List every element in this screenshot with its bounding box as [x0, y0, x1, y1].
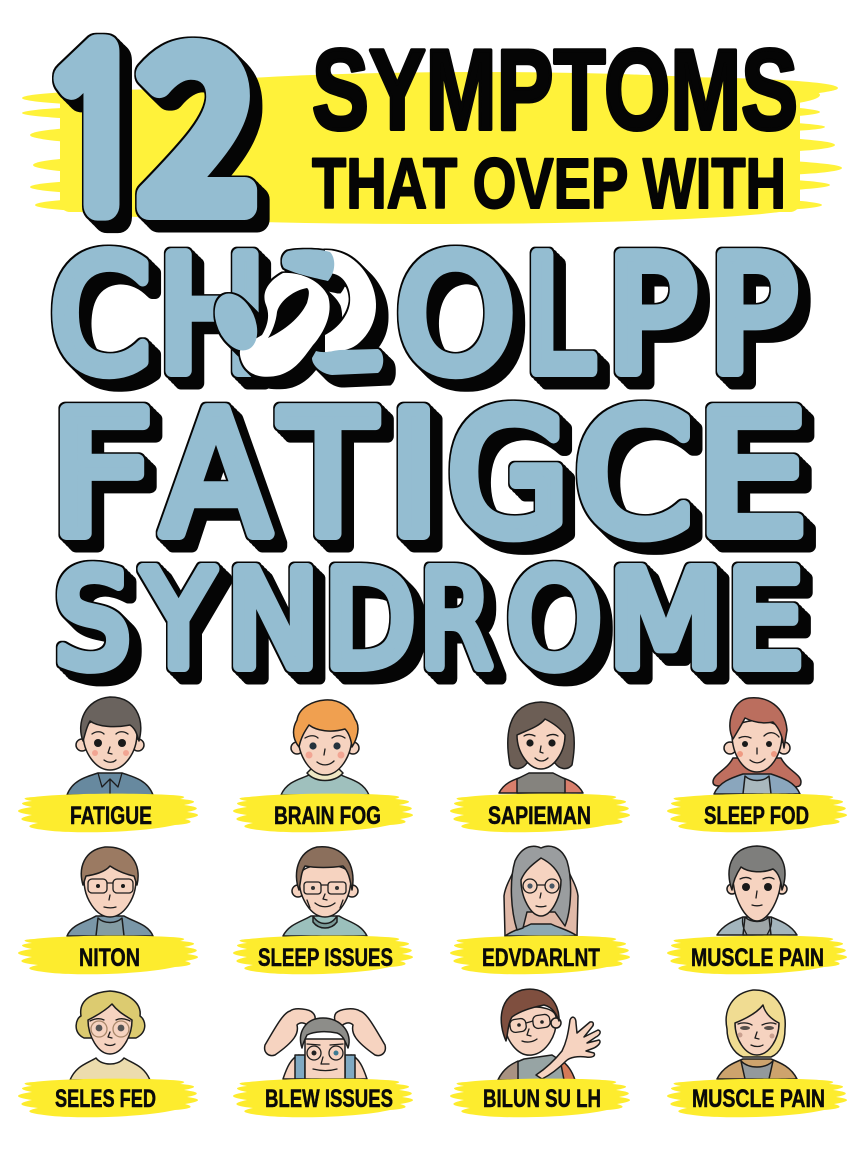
title line: SYNDROME — [54, 544, 804, 698]
title line: FATIGCE: T — [280, 376, 376, 574]
symptom: sleep fod — [667, 698, 847, 832]
title line: CH2OLPP — [50, 224, 797, 408]
label: BILUN SU LH — [483, 1085, 601, 1113]
title line: SYNDROME: R — [420, 544, 492, 698]
brush highlight — [450, 1079, 630, 1117]
label: FATIGUE — [70, 802, 152, 830]
portrait: grey-haired man raising both hands to head — [265, 1009, 385, 1079]
label: EDVDARLNT — [482, 944, 600, 972]
label: MUSCLE PAIN — [692, 1085, 825, 1113]
title line: FATIGCE: A — [162, 376, 270, 574]
symptom: edvdarlnt — [450, 846, 630, 974]
title line: SYNDROME: M — [608, 544, 724, 698]
label: BLEW ISSUES — [265, 1085, 393, 1113]
portrait: blonde woman with bob and thin glasses — [70, 991, 150, 1080]
title line: CH2OLPP: P — [709, 224, 797, 408]
title line: FATIGCE — [49, 376, 808, 574]
portrait: red-haired woman with ponytails — [713, 698, 801, 794]
label: SELES FED — [55, 1085, 156, 1113]
symptom: blew issues — [233, 1009, 413, 1117]
symptom: sleep issues — [233, 847, 413, 974]
label: SLEEP ISSUES — [258, 944, 393, 972]
title line: SYNDROME: E — [727, 544, 804, 698]
number 12: 1 — [38, 23, 153, 238]
title line: CH2OLPP: O — [396, 224, 515, 408]
title line: SYNDROME: Y — [142, 544, 215, 698]
brush highlight — [233, 1079, 413, 1117]
brush highlight — [18, 1079, 198, 1117]
brush highlight — [233, 794, 413, 832]
title line: CH2OLPP: H — [157, 224, 267, 408]
brush highlight — [667, 1079, 847, 1117]
title line: FATIGCE: I — [387, 376, 441, 574]
brush highlight — [450, 794, 630, 832]
title line: SYNDROME: D — [324, 544, 416, 698]
symptom: muscle pain, grey hair — [667, 846, 847, 974]
portrait: young man with black glasses — [67, 847, 153, 936]
title line: FATIGCE: G — [447, 376, 570, 574]
label: SLEEP FOD — [704, 802, 809, 830]
symptom: muscle pain, blonde — [667, 990, 847, 1117]
symptom: seles fed — [18, 991, 198, 1117]
portrait: older man with glasses — [283, 847, 367, 936]
label: SAPIEMAN — [488, 802, 591, 830]
symptom: niton — [18, 847, 198, 974]
symptom: brain fog — [233, 700, 413, 832]
brush highlight — [233, 936, 413, 974]
title line: SYNDROME: O — [507, 544, 602, 698]
symptom: fatigue — [18, 697, 198, 832]
brush highlight — [667, 936, 847, 974]
symptom: bilun su lh — [450, 989, 630, 1117]
number 12 — [38, 0, 255, 269]
label: BRAIN FOG — [274, 802, 381, 830]
tangled white numeral 2 — [206, 249, 383, 377]
brush highlight — [18, 936, 198, 974]
portrait: dark-haired man in collared shirt — [67, 697, 153, 795]
title line: FATIGCE: F — [49, 376, 154, 574]
portrait: orange-haired boy — [281, 700, 369, 795]
portrait: woman with brown bob — [499, 702, 583, 793]
title line: SYNDROME: S — [54, 544, 130, 698]
portrait: grey-haired boy — [717, 846, 797, 935]
label: MUSCLE PAIN — [691, 944, 824, 972]
brush highlight — [450, 936, 630, 974]
yellow brush behind header — [22, 72, 842, 224]
title line: SYNDROME: N — [226, 544, 320, 698]
portrait: long grey-haired woman with glasses — [504, 846, 578, 936]
title line: CH2OLPP: L — [524, 224, 593, 408]
title line: CH2OLPP: C — [50, 224, 150, 408]
symptom: sapieman — [450, 702, 630, 832]
brush highlight — [18, 794, 198, 832]
portrait: brown-haired man waving hand — [498, 989, 600, 1080]
title line: FATIGCE: C — [574, 376, 693, 574]
title line: FATIGCE: E — [696, 376, 808, 574]
label: NITON — [79, 944, 140, 972]
brush highlight — [667, 794, 847, 832]
title line: CH2OLPP: P — [606, 224, 696, 408]
portrait: blonde woman in tan jacket — [717, 990, 797, 1079]
